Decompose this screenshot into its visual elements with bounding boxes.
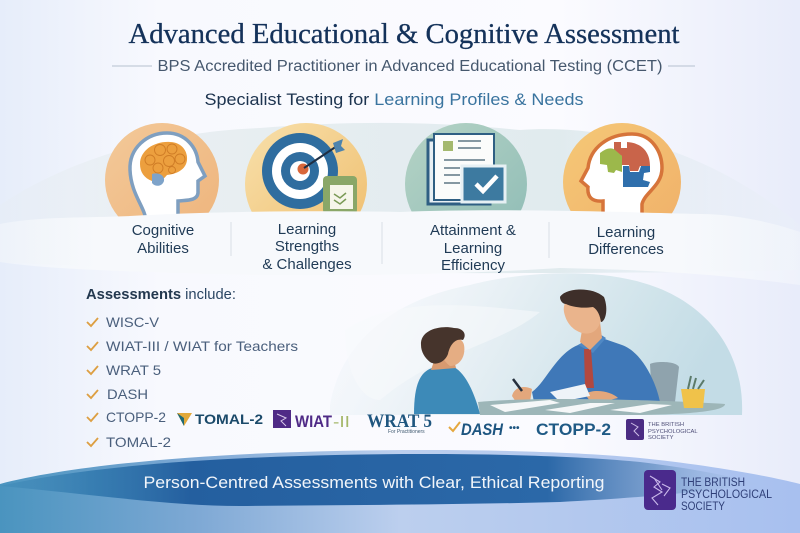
label: cognitive abilities: Abilities	[137, 240, 189, 257]
list items	[87, 314, 298, 450]
section heading: Specialist Testing for Learning Profiles & Needs	[204, 91, 584, 109]
label: attainment and learning efficiency: Attainment &	[430, 222, 516, 239]
logo: WRAT 5: For Practitioners	[388, 429, 425, 435]
title: Advanced Educational & Cognitive Assessment	[128, 18, 680, 50]
list heading: Assessments include:	[86, 287, 236, 303]
label: attainment and learning efficiency: Learning	[444, 240, 502, 257]
pen pot	[681, 376, 705, 408]
logo: DASH	[449, 420, 520, 439]
label: attainment and learning efficiency: Efficiency	[441, 257, 505, 274]
label cards wave	[0, 210, 800, 285]
list items: DASH	[107, 386, 148, 402]
list items: TOMAL-2	[106, 434, 171, 450]
label: learning strengths and challenges: & Challenges	[262, 256, 352, 273]
illustration: child and assessor at desk	[414, 289, 725, 415]
list items: WIAT-III / WIAT for Teachers	[106, 338, 298, 354]
icon: head with puzzle pieces	[563, 123, 681, 241]
logo: British Psychological Society small: THE BRITISH	[648, 422, 684, 428]
label: learning differences: Learning	[597, 224, 655, 241]
logo: British Psychological Society small: SOCIETY	[648, 435, 674, 441]
logo: WIAT-III	[273, 410, 350, 431]
card dividers	[231, 222, 549, 264]
logo: WRAT 5: WRAT 5	[367, 411, 432, 432]
assessor	[512, 289, 660, 404]
chair	[650, 362, 679, 402]
list items: CTOPP-2	[106, 409, 166, 425]
icon: target and checklist	[245, 123, 367, 245]
list items: WISC-V	[106, 314, 160, 330]
logo: CTOPP-2: CTOPP-2	[536, 421, 611, 439]
logo: WIAT-III: -II	[333, 414, 350, 431]
child	[414, 327, 480, 414]
icon: attainment documents with check	[405, 123, 527, 245]
label: learning strengths and challenges: Learning	[278, 221, 336, 238]
label: cognitive abilities: Cognitive	[132, 222, 194, 239]
logo: WIAT-III: WIAT	[295, 412, 333, 431]
logo: DASH: DASH	[461, 420, 504, 439]
footer background	[0, 450, 800, 533]
subtitle with rules: BPS Accredited Practitioner in Advanced Educational Testing (CCET)	[158, 58, 662, 75]
logo: The British Psychological Society	[644, 470, 773, 513]
list items: WRAT 5	[106, 362, 161, 378]
footer banner	[0, 454, 760, 506]
logo: DASH: •••	[509, 423, 520, 434]
footer tagline: Person-Centred Assessments with Clear, Ethical Reporting	[144, 474, 604, 492]
illustration backdrop	[330, 273, 742, 415]
desk	[478, 399, 725, 415]
icon: cognitive abilities head and brain	[105, 123, 219, 237]
background wave behind icons	[0, 123, 800, 273]
logo: British Psychological Society small	[626, 419, 698, 441]
assessments list	[86, 287, 298, 450]
illustration swoosh	[345, 305, 540, 400]
logo strip	[177, 410, 698, 441]
label: learning differences: Differences	[588, 241, 664, 258]
logo: British Psychological Society small: PSYCHOLOGICAL	[648, 429, 698, 435]
label: learning strengths and challenges: Strengths	[275, 238, 339, 255]
logo: The British Psychological Society: PSYCHOLOGICAL	[681, 489, 773, 501]
logo: TOMAL-2: TOMAL-2	[195, 411, 263, 427]
logo: The British Psychological Society: SOCIETY	[681, 501, 725, 513]
logo: The British Psychological Society: THE BRITISH	[681, 477, 745, 489]
